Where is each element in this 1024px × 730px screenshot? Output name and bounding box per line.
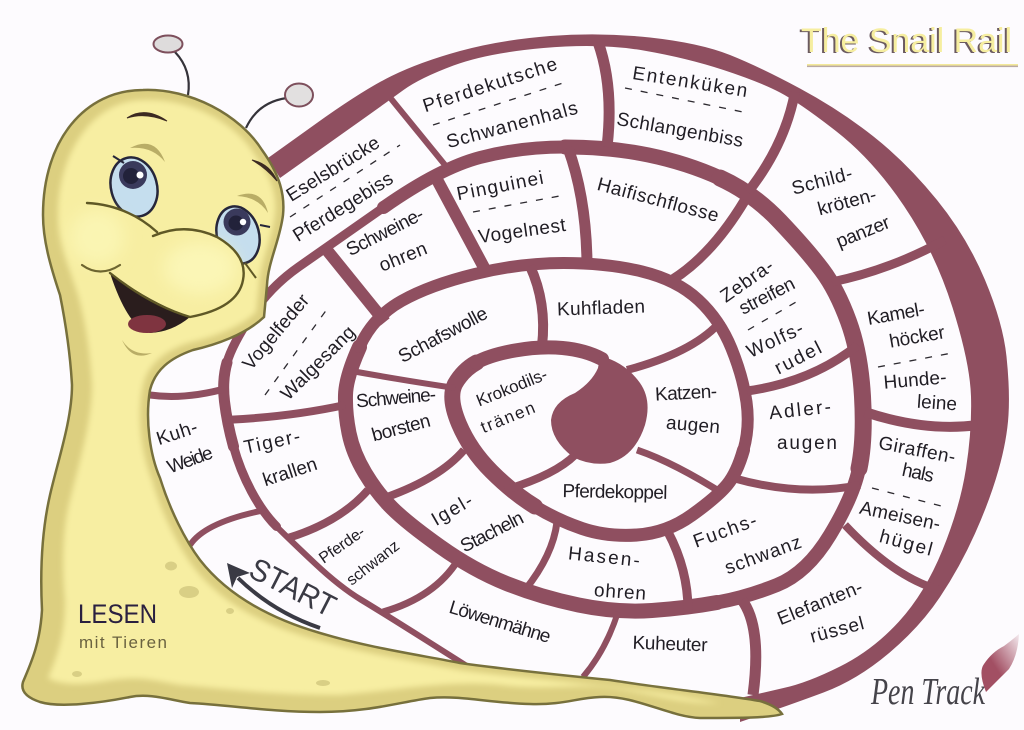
cell text: Pferdegebiss (289, 168, 397, 247)
START arrow (227, 563, 320, 628)
cell text: Vogelfeder (239, 290, 314, 374)
eyebrows (127, 113, 167, 121)
cell text: Weide (164, 443, 216, 478)
body spots (72, 562, 330, 686)
cell dashes (290, 145, 400, 217)
cell text: tränen (478, 398, 538, 437)
left eye (104, 152, 164, 222)
cell dashes (878, 353, 952, 367)
cell text: Kuheuter (632, 633, 708, 656)
cell text: Hasen- (567, 543, 641, 572)
cell text: ohren (593, 580, 647, 605)
cell text: Fuchs- (691, 510, 760, 553)
cell text: Schlangenbiss (615, 109, 745, 152)
cell text: Adler- (768, 397, 832, 424)
outer shell band (268, 34, 1009, 722)
snail shell spiral (150, 34, 1009, 722)
cell text: ohren (376, 238, 430, 277)
title: The Snail Rail (801, 22, 1012, 60)
icon: feather (981, 634, 1019, 692)
cell dashes (265, 305, 330, 395)
snail body (22, 90, 782, 718)
cell text: Pferdekoppel (562, 481, 668, 504)
cell text: hals (900, 460, 936, 487)
cell text: kröten- (815, 185, 879, 220)
cell text: Kuhfladen (557, 296, 645, 321)
LESEN label: LESEN (78, 599, 157, 629)
cell dashes (748, 298, 803, 330)
cell text: Kamel- (866, 299, 926, 330)
START text: START (244, 551, 342, 624)
cell dashes (625, 88, 743, 112)
cell dashes (473, 195, 565, 212)
cell text: Katzen- (655, 381, 718, 406)
nose and cheek (87, 203, 244, 317)
cell text: Vogelnest (477, 215, 568, 248)
mouth (110, 273, 190, 333)
middle row labels (154, 168, 837, 605)
cell text: rudel (771, 338, 825, 379)
cell text: Schwanenhals (444, 98, 580, 153)
cell text: Eselsbrücke (283, 132, 384, 206)
cell text: borsten (369, 411, 433, 446)
cell text: Tiger- (242, 426, 302, 459)
cell text: schwanz (344, 538, 403, 589)
PenTrack logo text: Pen Track (870, 671, 986, 713)
cell text: Entenküken (631, 63, 749, 102)
cell text: hügel (877, 526, 935, 561)
cell text: Schafswolle (395, 303, 491, 368)
cell text: Löwenmähne (447, 597, 553, 648)
cell text: leine (916, 392, 958, 415)
cell text: streifen (736, 273, 799, 319)
cell text: Wolfs- (744, 318, 807, 363)
cell dashes (872, 488, 945, 507)
cell text: schwanz (722, 532, 804, 579)
cell text: Walgesang (277, 322, 360, 405)
cell text: krallen (260, 454, 320, 491)
cell text: Hunde- (883, 367, 947, 394)
cell text: augen (665, 413, 721, 438)
cell text: Igel- (428, 490, 477, 531)
cell text: rüssel (808, 613, 866, 648)
inner spiral line (224, 147, 863, 668)
right antenna (246, 84, 313, 128)
cell text: Pferdekutsche (420, 54, 560, 117)
cell divider lines (150, 42, 978, 695)
cell text: Krokodils- (473, 365, 550, 410)
cell text: Schild- (789, 163, 855, 200)
cell text: Kuh- (154, 417, 200, 450)
cell text: augen (777, 433, 837, 454)
cell text: Giraffen- (877, 433, 957, 468)
right eye (210, 202, 270, 268)
inner row labels (355, 296, 721, 504)
left antenna (154, 36, 189, 95)
cell text: Stacheln (457, 508, 527, 557)
cell text: Haifischflosse (595, 174, 721, 227)
spiral centre blob (551, 356, 648, 464)
cell text: Schweine- (343, 204, 427, 261)
mit Tieren label: mit Tieren (79, 633, 167, 652)
cell text: höcker (888, 322, 947, 353)
cell text: Zebra- (717, 256, 778, 307)
cell dashes (433, 83, 563, 125)
cell text: Ameisen- (858, 498, 942, 535)
snail face (70, 113, 277, 356)
cell text: Pferde- (316, 524, 368, 567)
outer row labels (283, 54, 958, 656)
cell text: panzer (833, 212, 894, 253)
cell text: Pinguinei (455, 168, 545, 205)
title: The Snail Rail (799, 23, 1010, 61)
cell text: Schweine- (355, 385, 437, 412)
cell text: Elefanten- (775, 577, 866, 630)
